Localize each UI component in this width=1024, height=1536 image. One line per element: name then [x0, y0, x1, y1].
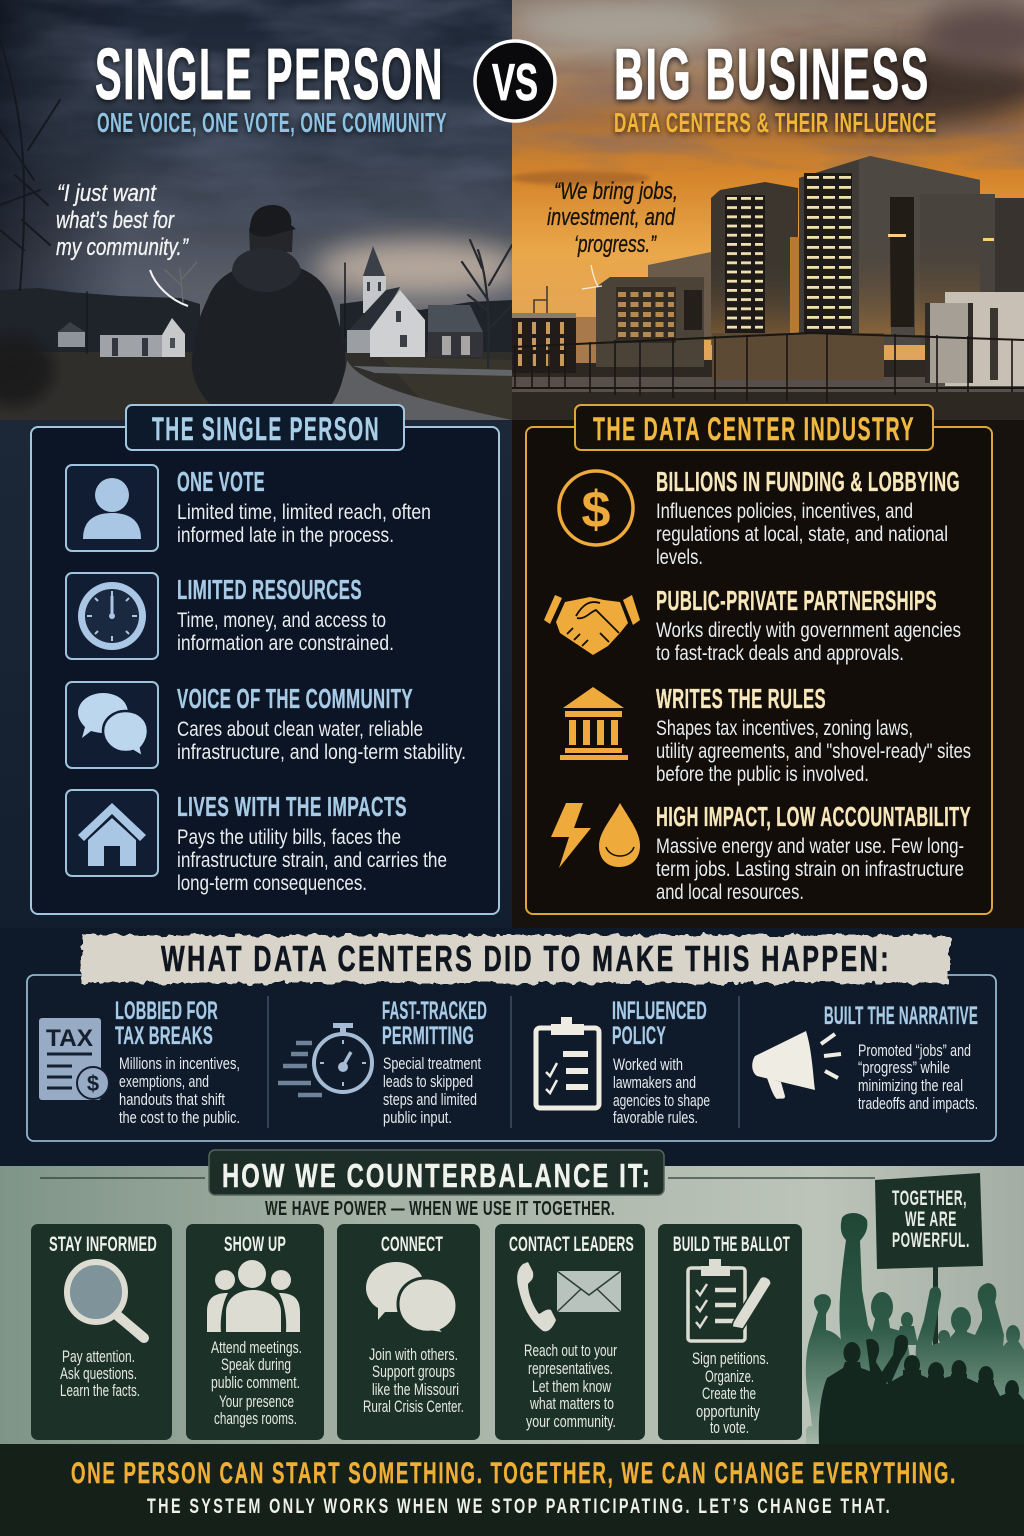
- item: one vote: ONE VOTE: [177, 466, 265, 497]
- card: connect: Rural Crisis Center.: [363, 1398, 464, 1416]
- quote: single person: my community.”: [56, 234, 189, 261]
- item: voice of the community: infrastructure, and long-term stability.: [177, 741, 466, 764]
- item: lives with the impacts: infrastructure strain, and carries the: [177, 849, 447, 872]
- ground and road: [0, 352, 512, 420]
- section: how we counterbalance it: [0, 1150, 1024, 1446]
- item: fast-tracked permitting: steps and limited: [383, 1090, 477, 1109]
- tower one: [711, 182, 798, 345]
- item: fast-tracked permitting: public input.: [383, 1108, 452, 1127]
- card: connect: like the Missouri: [372, 1381, 459, 1399]
- card: stay informed: STAY INFORMED: [49, 1233, 157, 1256]
- panel: the data center industry: [526, 405, 992, 914]
- item: voice of the community: VOICE OF THE COMMUNITY: [177, 683, 413, 714]
- item: public-private partnerships: to fast-track deals and approvals.: [656, 642, 904, 665]
- quote: industry: ‘progress.”: [574, 231, 657, 258]
- icon: lightning and water drop: [551, 803, 640, 868]
- item: built the narrative: tradeoffs and impacts.: [858, 1094, 978, 1113]
- item: writes the rules: [656, 683, 971, 786]
- icon: megaphone: [752, 1031, 841, 1099]
- item: limited resources: Time, money, and access to: [177, 609, 386, 632]
- security fence: [512, 333, 1024, 403]
- card: stay informed: Pay attention.: [62, 1348, 135, 1366]
- tab: heading: HOW WE COUNTERBALANCE IT:: [222, 1157, 652, 1194]
- icon: stopwatch: [278, 1023, 372, 1095]
- protest sign: TOGETHER,: [892, 1187, 967, 1210]
- card: contact leaders: what matters to: [529, 1395, 614, 1413]
- card: stay informed: Ask questions.: [60, 1365, 137, 1383]
- scene: rural community at dusk: [0, 0, 525, 420]
- item: voice of the community: [177, 683, 466, 764]
- subheading: WE HAVE POWER — WHEN WE USE IT TOGETHER.: [265, 1198, 615, 1220]
- item: lobbied for tax breaks: [115, 997, 240, 1127]
- item: writes the rules: WRITES THE RULES: [656, 683, 826, 714]
- card: build the ballot: BUILD THE BALLOT: [673, 1233, 790, 1256]
- item: fast-tracked permitting: Special treatment: [383, 1054, 481, 1073]
- icon: speech bubbles: [66, 682, 158, 768]
- card: show up: SHOW UP: [224, 1233, 286, 1256]
- item: built the narrative: [824, 1002, 978, 1113]
- card: connect: CONNECT: [381, 1233, 443, 1256]
- vs badge: [475, 41, 555, 121]
- item: influenced policy: lawmakers and: [613, 1073, 696, 1092]
- item: fast-tracked permitting: PERMITTING: [382, 1022, 474, 1050]
- panel tab: [126, 405, 404, 450]
- item: public-private partnerships: [656, 585, 961, 665]
- item: influenced policy: INFLUENCED: [612, 997, 707, 1025]
- card: build the ballot: to vote.: [710, 1419, 749, 1437]
- item: lives with the impacts: long-term consequences.: [177, 872, 367, 895]
- bare trees: [0, 40, 512, 368]
- icon: tax document: TAX: [46, 1025, 93, 1052]
- card: build the ballot: Organize.: [705, 1368, 754, 1386]
- page background: lower left: [0, 420, 512, 1170]
- item: billions: [656, 466, 960, 569]
- quote: single person: what’s best for: [56, 207, 175, 234]
- distant tree line: [0, 288, 512, 352]
- item: writes the rules: before the public is involved.: [656, 763, 869, 786]
- item: lobbied for tax breaks: LOBBIED FOR: [115, 997, 218, 1025]
- item: fast-tracked permitting: FAST-TRACKED: [382, 997, 487, 1025]
- card: show up: public comment.: [211, 1374, 300, 1392]
- page background: lower right: [512, 420, 1024, 930]
- card: build the ballot: opportunity: [696, 1403, 761, 1421]
- title block right: [614, 35, 937, 138]
- quote: single person: “I just want: [57, 180, 157, 207]
- warm yard behind fence: [712, 333, 884, 380]
- equipment containers: [925, 292, 1024, 386]
- card: contact leaders: representatives.: [528, 1360, 613, 1378]
- icon: group of people: [207, 1260, 300, 1332]
- protest sign: WE ARE: [905, 1208, 957, 1231]
- item: built the narrative: minimizing the real: [858, 1076, 963, 1095]
- subtitle left: ONE VOICE, ONE VOTE, ONE COMMUNITY: [97, 107, 447, 138]
- item: influenced policy: Worked with: [613, 1055, 683, 1074]
- item: lobbied for tax breaks: TAX BREAKS: [115, 1022, 213, 1050]
- item: lives with the impacts: LIVES WITH THE IMPACTS: [177, 791, 407, 822]
- icon: tax document: [39, 1018, 109, 1100]
- card: connect: Support groups: [372, 1363, 455, 1381]
- card: show up: Your presence: [219, 1393, 294, 1411]
- item: lobbied for tax breaks: handouts that shift: [119, 1090, 225, 1109]
- item: influenced policy: [612, 997, 710, 1127]
- item: one vote: [177, 466, 431, 547]
- page background: lower middle band: [0, 928, 1024, 1170]
- item: limited resources: [177, 574, 394, 655]
- card: show up: Attend meetings.: [211, 1339, 302, 1357]
- card: stay informed: Learn the facts.: [60, 1382, 140, 1400]
- item: high impact: and local resources.: [656, 881, 804, 904]
- item: lives with the impacts: Pays the utility bills, faces the: [177, 826, 401, 849]
- item: one vote: informed late in the process.: [177, 524, 394, 547]
- icon: tax document: $: [87, 1071, 99, 1096]
- item: fast-tracked permitting: [382, 997, 487, 1127]
- item: limited resources: LIMITED RESOURCES: [177, 574, 362, 605]
- item: lobbied for tax breaks: exemptions, and: [119, 1072, 209, 1091]
- item: high impact: [656, 801, 971, 904]
- item: lobbied for tax breaks: Millions in incentives,: [119, 1054, 240, 1073]
- icon: dollar coin: [559, 471, 633, 545]
- icon: magnifying glass: [67, 1262, 144, 1338]
- card: show up: changes rooms.: [214, 1410, 297, 1428]
- item: billions: levels.: [656, 546, 703, 569]
- panel: the single person: [31, 405, 499, 914]
- card: contact leaders: Reach out to your: [524, 1342, 617, 1360]
- warm gap between towers: [790, 237, 799, 337]
- icon: handshake: [544, 595, 640, 655]
- protest sign: POWERFUL.: [892, 1229, 970, 1252]
- card: contact leaders: CONTACT LEADERS: [509, 1233, 634, 1256]
- white church: [347, 246, 483, 357]
- item: one vote: Limited time, limited reach, often: [177, 501, 431, 524]
- card: show up: [186, 1224, 324, 1440]
- icon: government building: [560, 687, 628, 760]
- icon: clock: [66, 573, 158, 659]
- card: stay informed: [31, 1224, 172, 1440]
- item: influenced policy: agencies to shape: [613, 1091, 710, 1110]
- item: influenced policy: favorable rules.: [613, 1108, 698, 1127]
- icon: clipboard checklist: [536, 1017, 599, 1108]
- mid-rise office: [596, 252, 711, 367]
- icon: person: [66, 465, 158, 551]
- panel tab: [575, 405, 933, 450]
- icon: speech bubbles: [366, 1262, 457, 1334]
- card: contact leaders: Let them know: [532, 1378, 611, 1396]
- item: billions: regulations at local, state, and national: [656, 523, 948, 546]
- panel: what data centers did: [27, 975, 996, 1141]
- back row of raised arms: [806, 1213, 1024, 1444]
- card: show up: Speak during: [221, 1356, 291, 1374]
- title: single person: SINGLE PERSON: [95, 35, 444, 115]
- scene: data center campus at sunset: [510, 0, 1024, 420]
- item: influenced policy: POLICY: [612, 1022, 666, 1050]
- quote: industry: investment, and: [547, 204, 675, 231]
- icon: dollar coin: $: [582, 481, 611, 539]
- card: build the ballot: Sign petitions.: [692, 1350, 769, 1368]
- item: billions: Influences policies, incentives, and: [656, 500, 913, 523]
- card: contact leaders: [495, 1224, 645, 1440]
- ground: [512, 360, 1024, 420]
- item: lobbied for tax breaks: the cost to the public.: [119, 1108, 240, 1127]
- vs badge: VS: [492, 54, 538, 112]
- quote: single person: [56, 180, 189, 306]
- item: fast-tracked permitting: leads to skipped: [383, 1072, 473, 1091]
- quote: industry: [547, 178, 678, 289]
- item: lives with the impacts: [177, 791, 447, 895]
- item: voice of the community: Cares about clean water, reliable: [177, 718, 423, 741]
- low building left: [512, 286, 597, 373]
- card: build the ballot: Create the: [702, 1385, 756, 1403]
- title block left: [95, 35, 447, 138]
- card: contact leaders: your community.: [526, 1413, 616, 1431]
- card: build the ballot: [658, 1224, 802, 1440]
- icon: house: [66, 790, 158, 876]
- item: built the narrative: “progress” while: [858, 1058, 950, 1077]
- front row of people: [819, 1335, 1024, 1444]
- quote: industry: “We bring jobs,: [554, 178, 678, 205]
- footer band: [0, 1444, 1024, 1536]
- card: connect: Join with others.: [369, 1346, 458, 1364]
- protest sign: [875, 1173, 983, 1345]
- white house: [58, 318, 185, 357]
- item: built the narrative: Promoted “jobs” and: [858, 1041, 971, 1060]
- card: connect: [337, 1224, 480, 1440]
- icon: clipboard and pencil: [688, 1259, 771, 1341]
- crowd silhouettes: [806, 1173, 1024, 1444]
- tab: heading: [209, 1150, 664, 1195]
- item: limited resources: information are constrained.: [177, 632, 394, 655]
- man seen from behind: [192, 205, 345, 404]
- icon: phone and envelope: [517, 1262, 621, 1331]
- item: writes the rules: Shapes tax incentives, zoning laws,: [656, 717, 913, 740]
- panel tab: THE SINGLE PERSON: [152, 411, 380, 447]
- tower two: [799, 156, 1024, 348]
